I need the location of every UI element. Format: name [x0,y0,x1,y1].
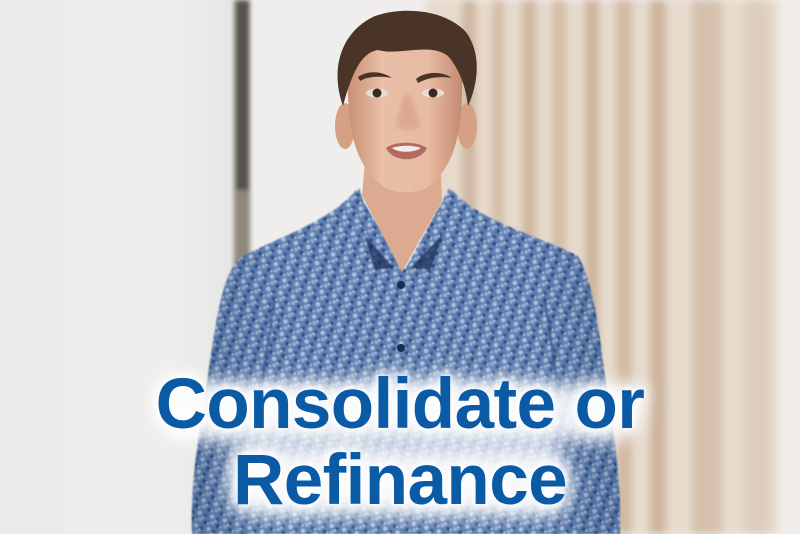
mouth [386,143,427,159]
white glow behind title [165,385,635,515]
nose [396,95,420,130]
ears [335,103,477,149]
shirt buttons [397,281,405,352]
neck [362,150,442,272]
title: Consolidate or [156,365,644,444]
eyes [366,88,444,98]
eyebrows [358,72,452,83]
face [348,38,462,192]
title second line: Refinance [233,441,567,520]
shirt torso and arms [192,190,620,534]
curtain [425,0,800,534]
dark vertical post [234,0,250,534]
collar [344,188,470,272]
hair [338,11,477,106]
